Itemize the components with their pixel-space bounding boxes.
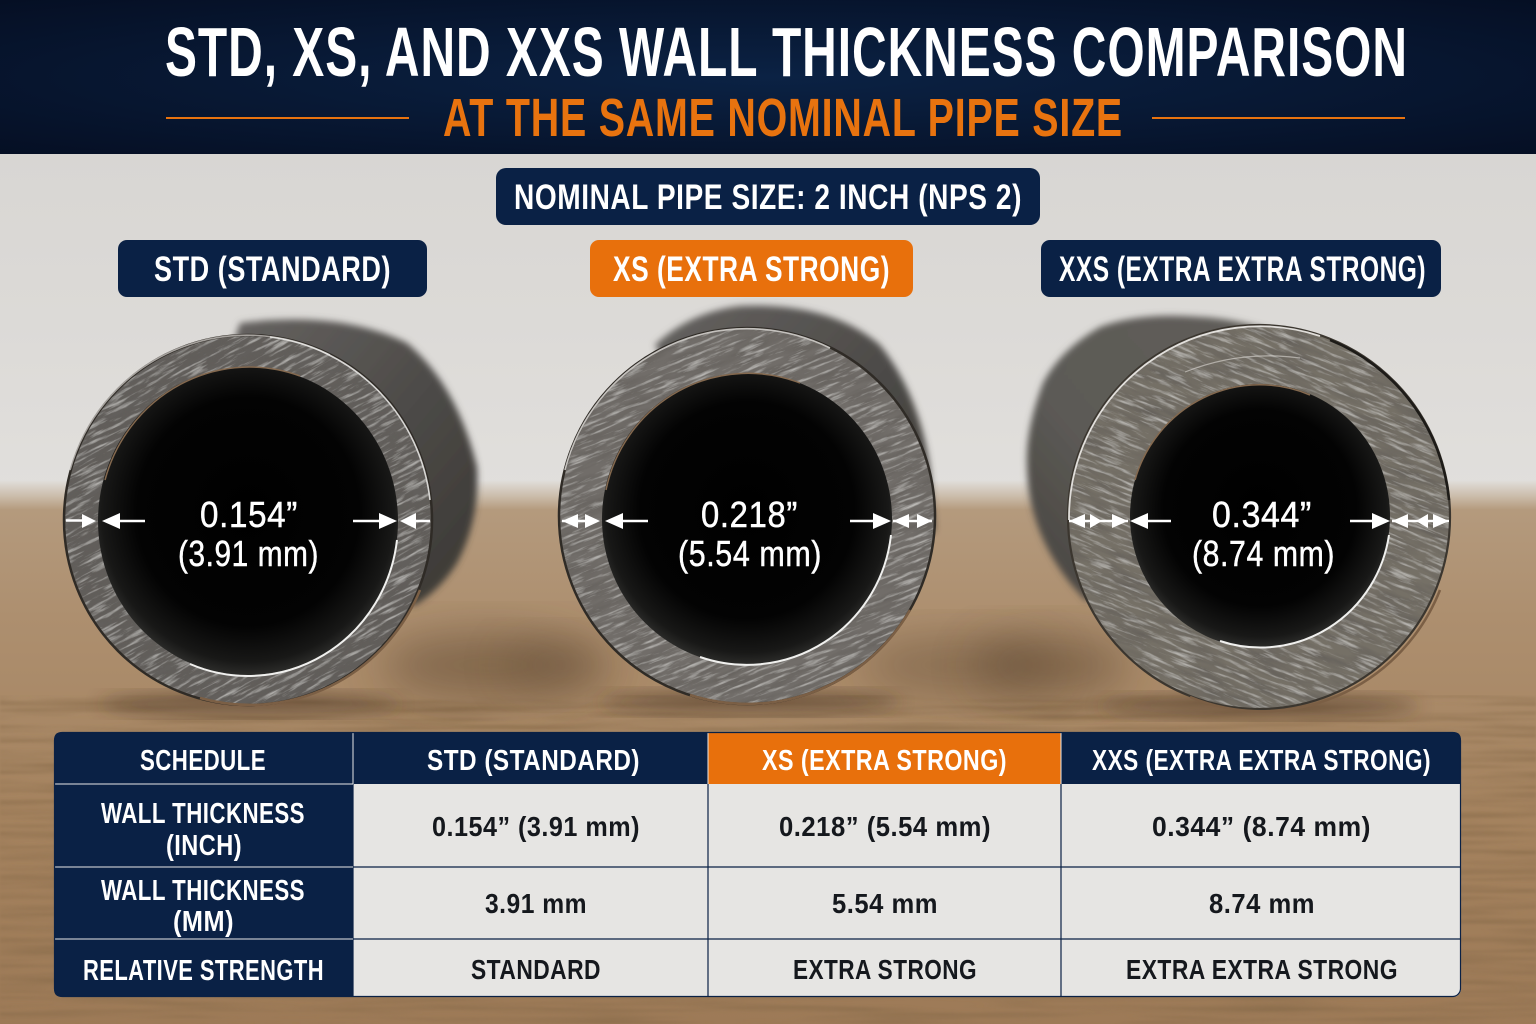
table grid lines — [54, 732, 1461, 997]
background: wall — [0, 150, 1536, 490]
table header row: SCHEDULE — [140, 745, 266, 777]
comparison table — [54, 732, 1461, 997]
background: wooden table — [0, 480, 1536, 1024]
header band — [0, 0, 1536, 154]
badge: nominal pipe size — [496, 168, 1040, 225]
table row: wall thickness mm: 8.74 mm — [1209, 888, 1315, 919]
pipe: XXS: (8.74 mm) — [1192, 533, 1335, 574]
badge: XS — [590, 240, 913, 297]
table row: wall thickness inch: 0.154” (3.91 mm) — [432, 811, 640, 842]
table row: relative strength: EXTRA STRONG — [793, 954, 977, 985]
wall arrows — [66, 513, 430, 529]
pipe: STD — [0, 270, 497, 770]
table row: wall thickness mm: 3.91 mm — [485, 888, 587, 919]
table row labels: (INCH) — [166, 830, 242, 862]
table header row: STD (STANDARD) — [427, 745, 640, 777]
table row labels: WALL THICKNESS — [101, 875, 305, 907]
badge: nominal pipe size: NOMINAL PIPE SIZE: 2 INCH (NPS 2) — [514, 178, 1022, 217]
wall value: 0.218” — [701, 494, 798, 535]
table shadows under pipes — [100, 633, 1420, 716]
wall value: 0.154” — [200, 494, 298, 535]
pipe: STD: (3.91 mm) — [178, 533, 319, 574]
table row labels: RELATIVE STRENGTH — [83, 955, 324, 987]
table header row: XXS (EXTRA EXTRA STRONG) — [1092, 745, 1431, 777]
table row: relative strength: EXTRA EXTRA STRONG — [1126, 954, 1398, 985]
table row: wall thickness mm: 5.54 mm — [832, 888, 938, 919]
badge: STD — [118, 240, 427, 297]
pipe: XXS — [1010, 267, 1508, 767]
wall value: 0.344” — [1212, 494, 1312, 535]
table row: wall thickness inch: 0.344” (8.74 mm) — [1152, 811, 1371, 842]
wall arrows — [562, 513, 932, 529]
wall arrows — [1069, 513, 1449, 529]
badge: XS: XS (EXTRA STRONG) — [613, 250, 890, 289]
badge: XXS — [1041, 240, 1441, 297]
pipe: XS — [502, 271, 992, 761]
pipe: XS: (5.54 mm) — [678, 533, 822, 574]
table row labels: WALL THICKNESS — [101, 798, 305, 830]
table row: wall thickness mm — [485, 888, 1315, 919]
table row: wall thickness inch: 0.218” (5.54 mm) — [779, 811, 991, 842]
table header row — [54, 732, 1461, 784]
table row: relative strength: STANDARD — [471, 954, 601, 985]
badge: STD: STD (STANDARD) — [154, 250, 391, 289]
table header row: XS (EXTRA STRONG) — [762, 745, 1007, 777]
table row labels — [54, 784, 353, 997]
table row: wall thickness inch — [432, 811, 1371, 842]
table row labels: (MM) — [173, 906, 234, 938]
table row: relative strength — [471, 954, 1398, 985]
subtitle: AT THE SAME NOMINAL PIPE SIZE — [443, 88, 1123, 148]
